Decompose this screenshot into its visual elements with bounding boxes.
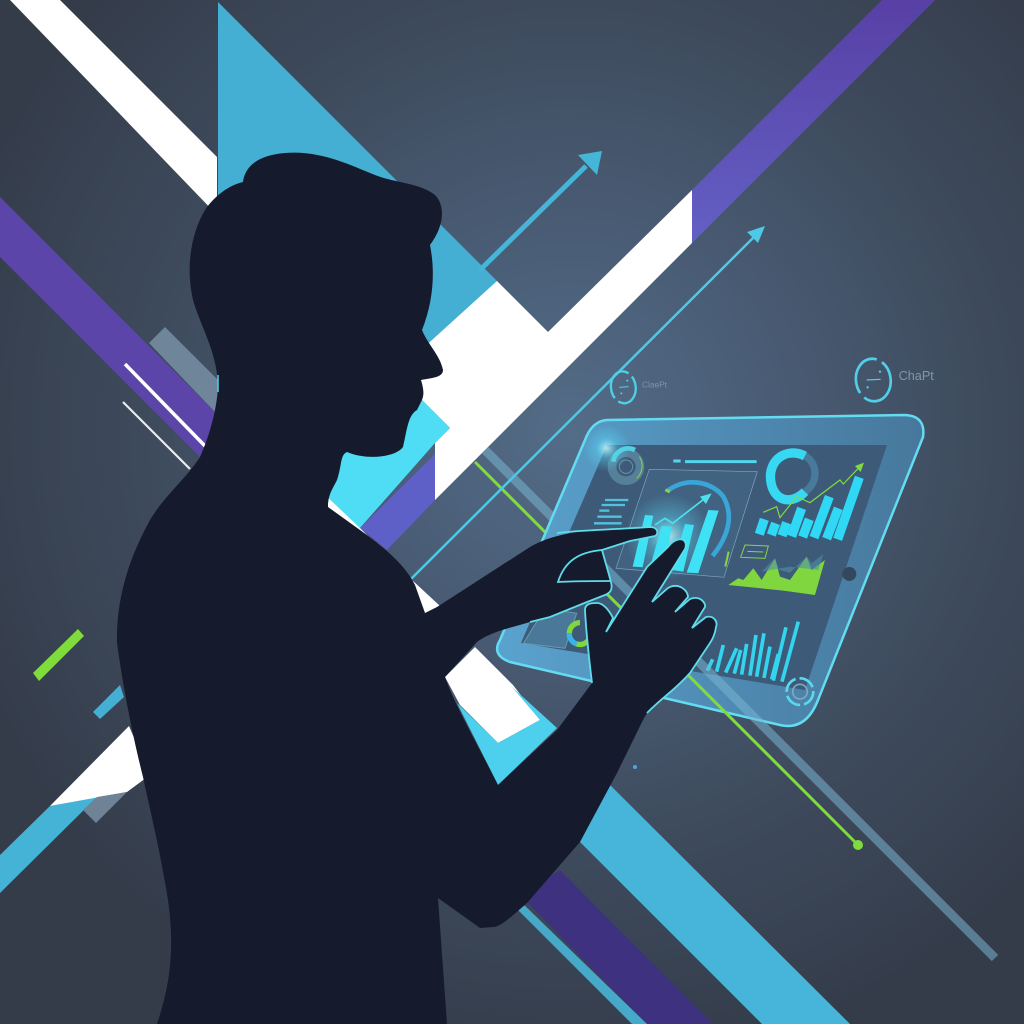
- shape: bright cyan block: [320, 400, 450, 528]
- bar: green accent: [33, 629, 84, 681]
- stripe: cyan lower left: [0, 797, 97, 893]
- shape: white lower left: [50, 726, 150, 806]
- arrow: cyan thick: [480, 151, 602, 270]
- widget: small green box: [741, 545, 768, 558]
- silhouette: head, torso and pointing arm: [117, 153, 657, 1024]
- stripe: purple left: [0, 197, 215, 470]
- arrow: cyan thin: [410, 226, 765, 580]
- stripe: translucent diagonal, over tablet: [600, 563, 995, 958]
- line: green with end dot: [600, 587, 863, 850]
- bar: cyan accent: [93, 685, 124, 719]
- silhouette: raised hand and forearm: [400, 539, 717, 928]
- widget: centre chart: [616, 469, 757, 580]
- shape: white chevron: [410, 190, 692, 500]
- stripe: thin cyan lower: [512, 900, 647, 1024]
- widget: green trend arrow: [763, 463, 864, 518]
- widget: bottom right dial: [787, 678, 813, 705]
- top left sparkle: [583, 425, 630, 472]
- tablet: [497, 415, 923, 726]
- widget: top left dial: [612, 448, 642, 481]
- shape: tiny white wedge at arm: [412, 580, 440, 616]
- stripe: cyan lower right: [570, 775, 850, 1024]
- tablet body: [497, 415, 923, 726]
- stripe: translucent diagonal, behind tablet: [485, 450, 600, 565]
- line: green, behind tablet: [475, 462, 600, 587]
- shape: translucent grey lower left: [83, 792, 127, 823]
- widget: header bars: [673, 456, 757, 466]
- shape: cyan triangle: [218, 2, 497, 360]
- widget: lower left panel and donut: [523, 608, 590, 648]
- icon and label: floating small chart: [609, 370, 668, 405]
- tablet camera button: [842, 567, 856, 581]
- widget: green area chart: [728, 554, 825, 595]
- shape: small white wedge: [322, 492, 372, 540]
- stripe: purple top right: [692, 0, 935, 243]
- stripe: translucent grey left: [149, 327, 220, 412]
- stripe: white top left: [10, 0, 217, 215]
- tablet widgets: [523, 425, 864, 705]
- icon and label: floating chart: [853, 356, 934, 404]
- hand outlines: [530, 527, 717, 713]
- widget: left list bars: [594, 500, 628, 523]
- line: white thin: [123, 402, 190, 469]
- widget: donut C: [770, 453, 815, 500]
- person silhouette: [117, 153, 717, 1024]
- stripe: dark purple lower: [520, 870, 713, 1024]
- icon and label: floating chart: ChaPt: [899, 369, 934, 383]
- widget: lower bar chart: [707, 622, 798, 682]
- tablet screen: [521, 445, 887, 690]
- shape: cyan block under white: [457, 687, 557, 785]
- widget: top right bar chart: [759, 477, 859, 539]
- dot: small blue spark: [633, 765, 637, 769]
- shape: purple block: [360, 454, 435, 550]
- line: white thick: [125, 364, 205, 446]
- shape: white block lower centre: [445, 647, 540, 743]
- icon and label: floating small chart: ClaePt: [642, 379, 668, 389]
- cyan sliver on chest edge: [217, 375, 219, 392]
